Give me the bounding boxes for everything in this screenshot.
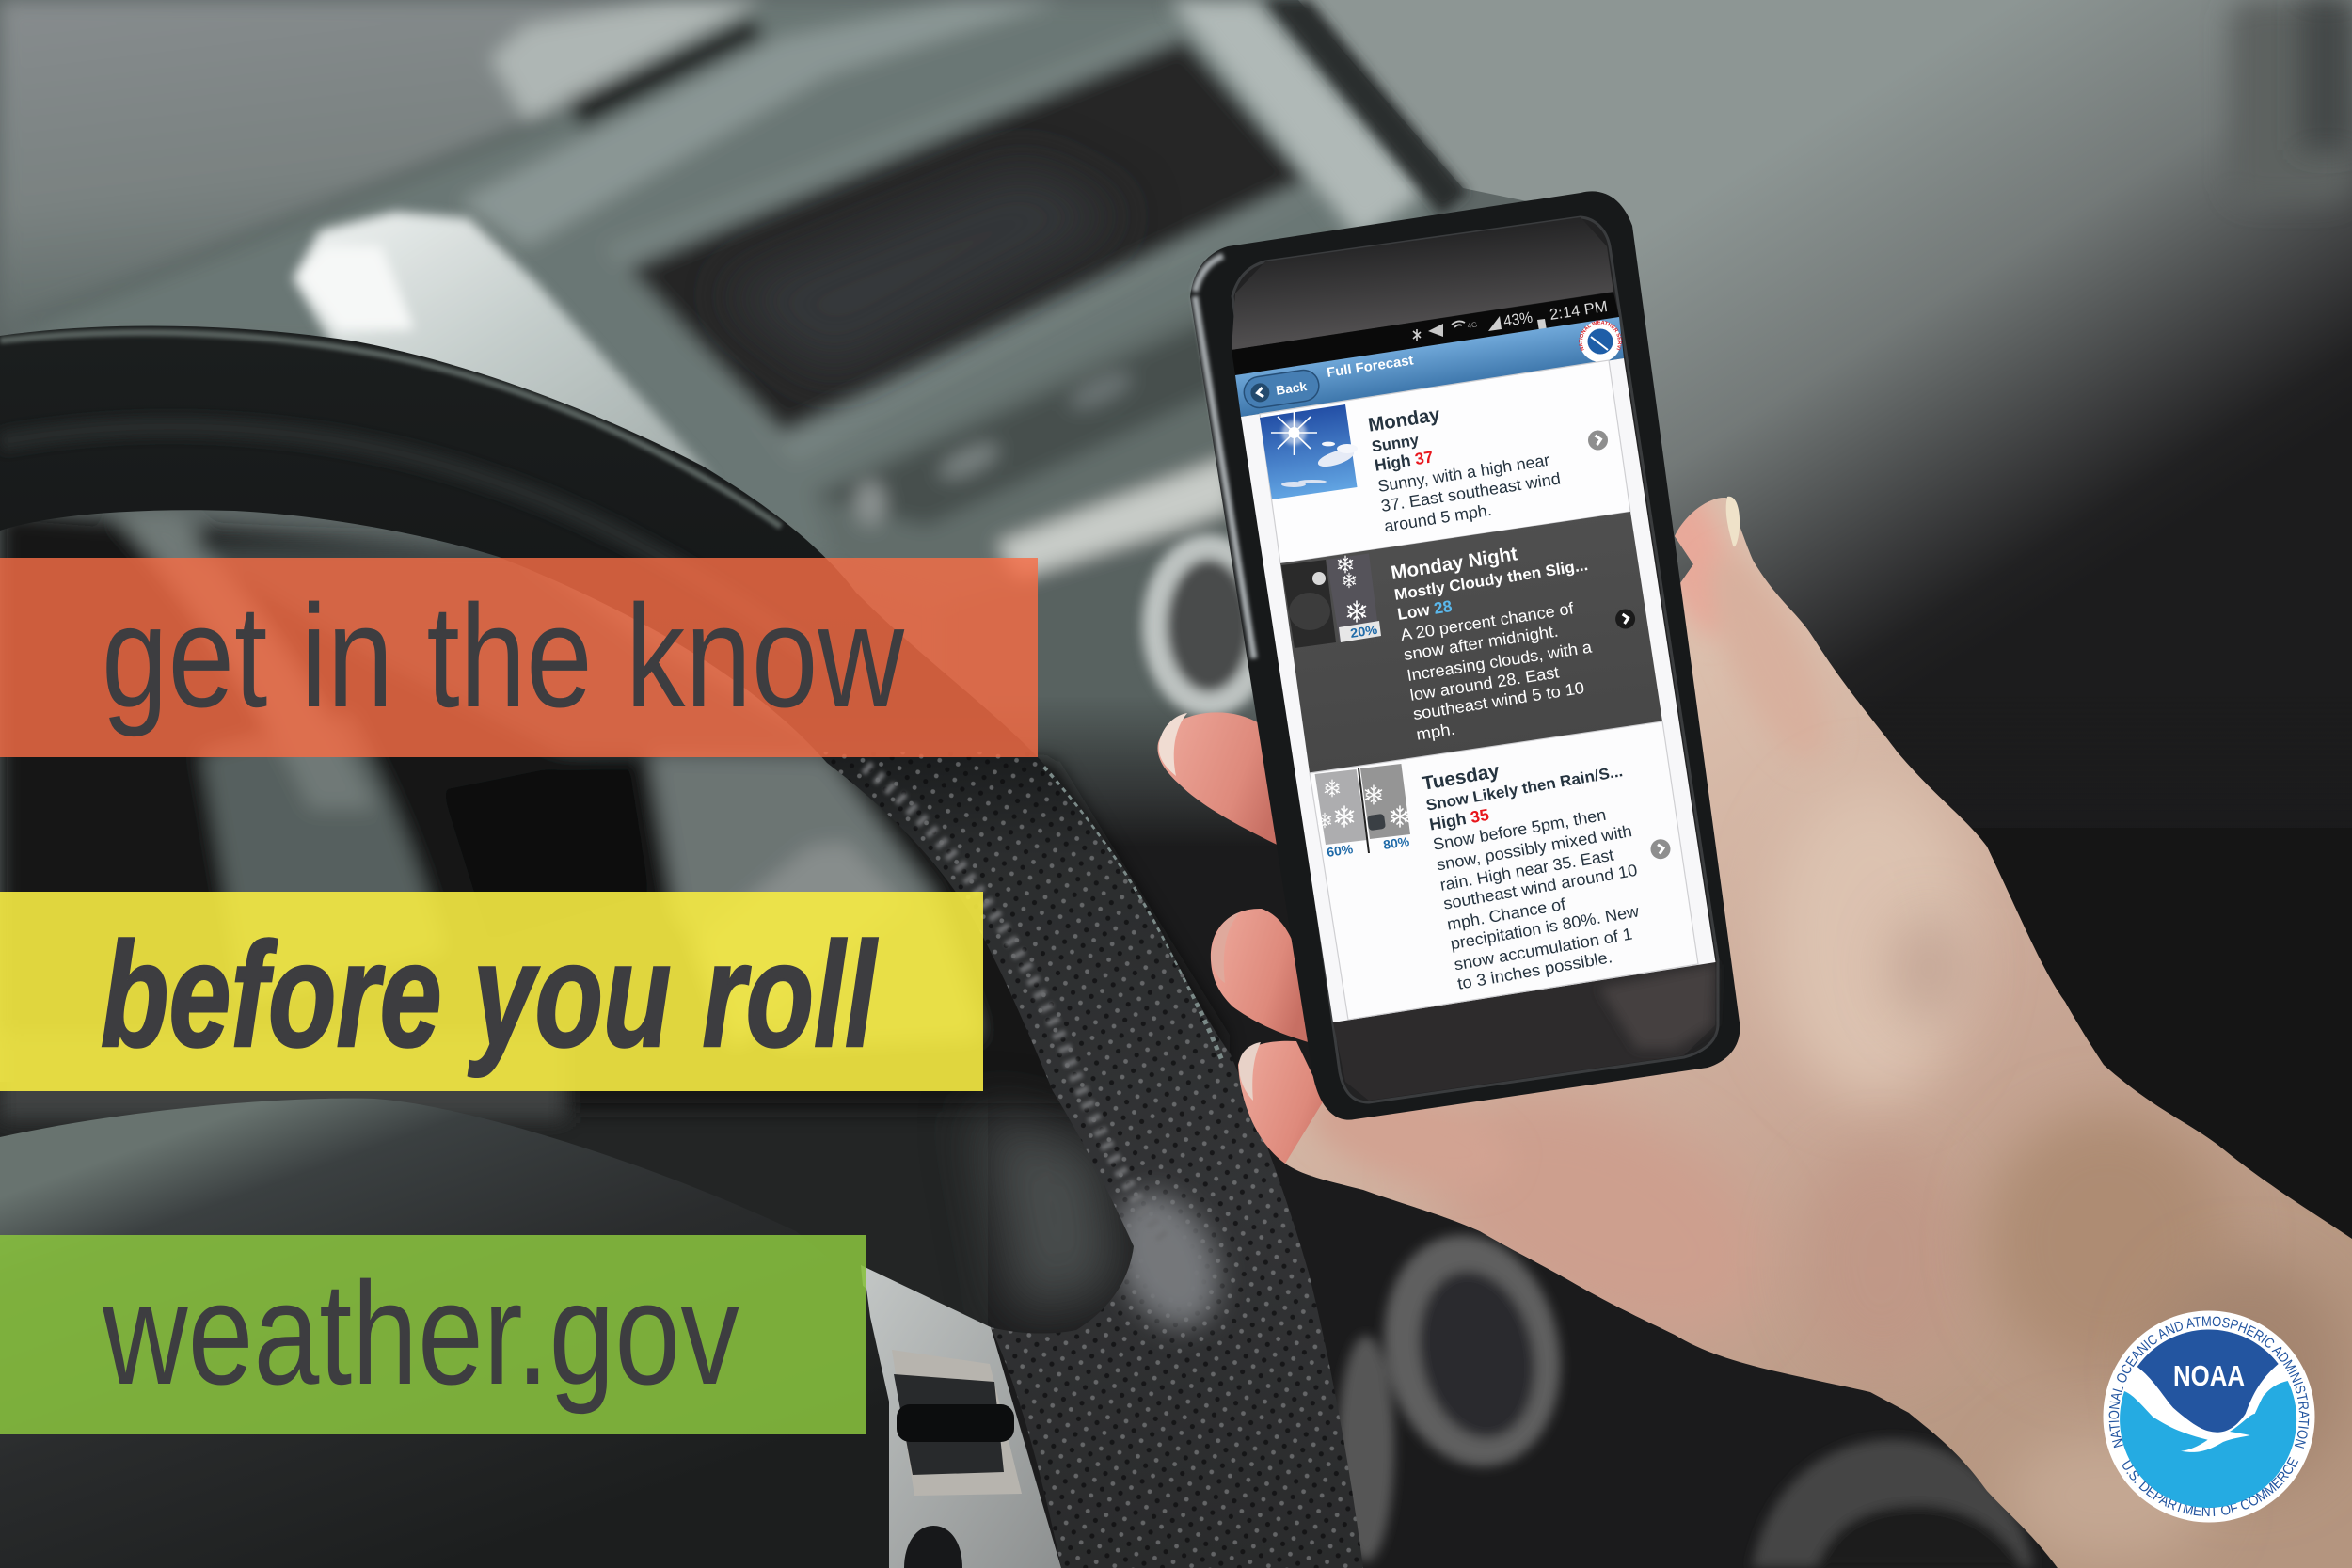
phone body: [1190, 191, 1740, 1120]
forecast text: Tuesday: Tuesday: [1421, 760, 1502, 795]
blue app header: [1235, 317, 1624, 417]
icon: chevron: [1650, 839, 1671, 859]
forecast text: Monday: around 5 mph.: [1383, 500, 1493, 535]
steering wheel hub and cruise buttons: [0, 1099, 1061, 1568]
forecast text: Monday: Monday: [1367, 404, 1442, 436]
console knob: [1154, 546, 1263, 705]
forecast text: Monday Night: mph.: [1415, 720, 1456, 744]
forecast text: Monday Night: Mostly Cloudy then Slig...: [1393, 557, 1589, 604]
card: Tuesday: [1310, 721, 1698, 1020]
bottom bezel: [1333, 962, 1715, 1101]
icon: snow then rain and snow: 80%: [1382, 834, 1410, 852]
icon: night cloud and snow: 20%: [1349, 623, 1378, 641]
forecast text: Tuesday: precipitation is 80%. New: [1449, 901, 1641, 953]
palm and wrist: [1223, 464, 2352, 1568]
card: Monday: [1260, 360, 1630, 563]
forecast text: Tuesday: [1421, 738, 1656, 993]
right dashboard: [1169, 0, 2352, 847]
icon: sunny sky: [1260, 404, 1358, 499]
upper dashboard and navigation recess: [0, 0, 1439, 781]
forecast text: Tuesday: mph. Chance of: [1445, 895, 1567, 934]
forecast text: Monday: Sunny, with a high near: [1376, 451, 1551, 496]
top bezel: [1232, 217, 1613, 350]
hand holding phone: [1157, 464, 2352, 1568]
phone metal rim: [1195, 256, 1254, 658]
banner: weather.gov: weather.gov: [102, 1252, 739, 1415]
status bar: 4G: [1467, 320, 1478, 330]
silver centre-stack trim: [293, 212, 715, 480]
icon: national weather service seal: NATIONAL WEATHER SERVICE: [1579, 320, 1622, 352]
fingers: [1157, 712, 1347, 1164]
forecast text: Tuesday: High 35: [1428, 805, 1491, 834]
smartphone: [1190, 191, 1740, 1120]
logo: NOAA seal: U.S. DEPARTMENT OF COMMERCE: [2122, 1456, 2299, 1516]
steering wheel rim: [0, 325, 1411, 1568]
forecast text: Monday: High 37: [1374, 447, 1435, 475]
header title: Full Forecast: [1326, 353, 1415, 381]
seal ring text: NATIONAL OCEANIC AND ATMOSPHERIC ADMINISTRATION: [2109, 1316, 2309, 1449]
banner: get in the know: get in the know: [102, 575, 905, 737]
forecast screen: [1241, 358, 1716, 1022]
forecast text: Monday Night: Increasing clouds, with a: [1406, 638, 1594, 685]
forecast text: Tuesday: rain. High near 35. East: [1438, 846, 1615, 895]
card: Monday Night: [1280, 512, 1662, 773]
forecast text: Monday: Sunny: [1371, 432, 1421, 455]
forecast text: Monday Night: low around 28. East: [1408, 662, 1561, 705]
forecast text: Monday Night: southeast wind 5 to 10: [1411, 678, 1586, 723]
icon: night cloud and snow: [1281, 553, 1381, 648]
console dials: [1338, 1219, 2034, 1568]
status bar: 43%: [1502, 309, 1534, 330]
forecast text: Monday: 37. East southeast wind: [1379, 468, 1562, 515]
forecast text: Monday Night: Low 28: [1396, 596, 1454, 624]
phone glass: [1232, 217, 1718, 1102]
lower interior dark zone: [0, 696, 2352, 1568]
icon: chevron: [1588, 431, 1608, 450]
forecast text: Tuesday: to 3 inches possible.: [1456, 947, 1613, 993]
banner: before you roll: before you roll: [101, 912, 878, 1078]
status bar: [1232, 292, 1619, 375]
icon: chevron: [1615, 610, 1635, 628]
status bar: 2:14 PM: [1549, 298, 1609, 324]
logo: NOAA seal: [2104, 1311, 2314, 1522]
seal wordmark: NOAA: [2173, 1359, 2245, 1392]
back button: Back: [1275, 379, 1309, 398]
forecast text: Tuesday: southeast wind around 10: [1442, 861, 1639, 913]
thumb nail: [1726, 497, 1740, 546]
instrument cluster behind wheel: [0, 513, 1223, 1119]
icon: snow then rain and snow: [1315, 764, 1410, 860]
forecast text: Monday Night: Monday Night: [1390, 543, 1519, 584]
forecast text: Tuesday: snow, possibly mixed with: [1435, 821, 1633, 874]
forecast text: Tuesday: Snow Likely then Rain/S...: [1424, 763, 1624, 815]
forecast text: Monday: [1367, 387, 1565, 535]
forecast text: Tuesday: snow accumulation of 1: [1453, 924, 1634, 974]
forecast text: Monday Night: [1390, 532, 1611, 744]
forecast text: Tuesday: Snow before 5pm, then: [1431, 805, 1608, 854]
forecast text: Monday Night: snow after midnight.: [1403, 621, 1560, 664]
back button: [1242, 368, 1321, 410]
icon: snow then rain and snow: 60%: [1326, 842, 1354, 860]
seal dark blue sky: [2137, 1329, 2279, 1433]
banner: before you roll: [0, 892, 983, 1091]
forecast text: Monday Night: A 20 percent chance of: [1399, 598, 1575, 644]
seal light blue ocean and bird: [2120, 1381, 2296, 1508]
